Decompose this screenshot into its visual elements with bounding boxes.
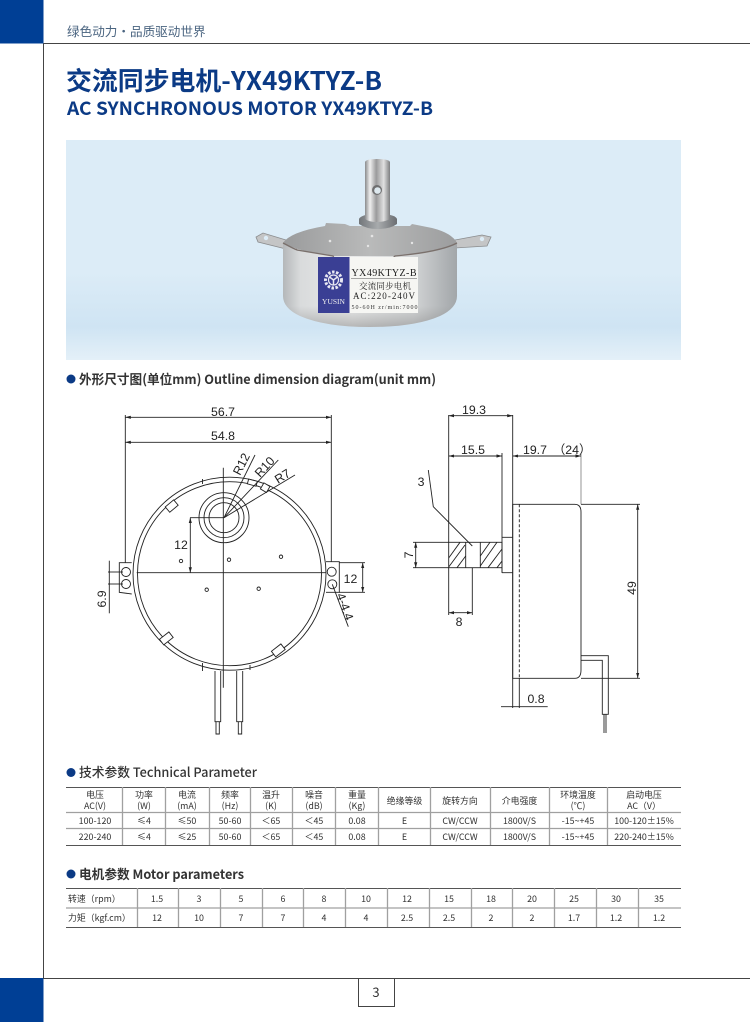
dimension 4-4.4 xyxy=(332,584,356,627)
table: motor parameters: 2 xyxy=(530,911,535,924)
dimension R12: R12 xyxy=(230,451,253,477)
table: motor parameters: 力矩（kgf.cm） xyxy=(68,911,131,924)
page number box xyxy=(358,978,394,1006)
table: motor parameters: 1.2 xyxy=(610,911,622,924)
table: technical parameter: (Hz) xyxy=(222,799,238,812)
table: technical parameter: (W) xyxy=(137,799,151,812)
table: technical parameter: ≤4 xyxy=(137,830,151,843)
dimension 7: 7 xyxy=(402,551,416,558)
table: technical parameter: 100-120±15% xyxy=(614,814,674,827)
table: technical parameter: ＜65 xyxy=(262,814,280,827)
footer corner block xyxy=(0,978,44,1022)
panel: product photo xyxy=(66,140,681,360)
table: motor parameters: 2 xyxy=(489,911,494,924)
table: motor parameters: 18 xyxy=(486,892,496,905)
dimension R10: R10 xyxy=(252,454,278,480)
table: technical parameter: 220-240±15% xyxy=(614,830,674,843)
table: technical parameter: 50-60 xyxy=(219,814,241,827)
table: motor parameters: 4 xyxy=(322,911,327,924)
dimension 19.3: 19.3 xyxy=(462,403,486,417)
table: motor parameters: 20 xyxy=(527,892,537,905)
table: motor parameters: 12 xyxy=(402,892,412,905)
table: motor parameters: 8 xyxy=(322,892,327,905)
table: technical parameter: 220-240 xyxy=(79,830,111,843)
motor label: AC:220-240V xyxy=(353,291,416,301)
table: technical parameter: AC(V) xyxy=(84,799,106,812)
table: motor parameters: 2.5 xyxy=(443,911,455,924)
dimension 49: 49 xyxy=(625,581,639,595)
table: technical parameter: 频率 xyxy=(221,788,239,801)
table: motor parameters: 5 xyxy=(239,892,244,905)
title: english: AC SYNCHRONOUS MOTOR YX49KTYZ-B xyxy=(66,95,433,121)
table: technical parameter: 介电强度 xyxy=(502,794,537,807)
table: technical parameter: E xyxy=(402,830,407,843)
dimension R12 xyxy=(224,451,255,518)
table: technical parameter xyxy=(66,787,681,846)
table: technical parameter: ≤50 xyxy=(178,814,196,827)
heading: outline dimension diagram: 外形尺寸图(单位mm) Outline dimension diagram(unit mm) xyxy=(79,369,436,388)
dimension 0.8 xyxy=(501,678,548,708)
motor label: YX49KTYZ-B xyxy=(352,268,417,279)
heading: technical parameter: 技术参数 Technical Parameter xyxy=(79,762,258,781)
table: motor parameters: 2.5 xyxy=(401,911,413,924)
table: motor parameters: 1.2 xyxy=(653,911,665,924)
motor label xyxy=(318,257,418,313)
table: motor parameters: 4 xyxy=(364,911,369,924)
table: motor parameters: 35 xyxy=(654,892,664,905)
dimension 19.7 (24): （24） xyxy=(553,443,591,457)
table: technical parameter: 1800V/S xyxy=(503,814,536,827)
table: motor parameters: 15 xyxy=(444,892,454,905)
table: technical parameter: 0.08 xyxy=(348,814,366,827)
table: technical parameter: 电压 xyxy=(86,788,104,801)
table: technical parameter: (mA) xyxy=(177,799,197,812)
motor label: 50-60H zr/min:7000 xyxy=(352,305,418,311)
table: technical parameter: ≤25 xyxy=(178,830,196,843)
table: motor parameters: 7 xyxy=(239,911,244,924)
chart: front view outline drawing xyxy=(95,405,365,734)
chart: side view outline drawing xyxy=(402,403,640,733)
table: technical parameter: (K) xyxy=(265,799,277,812)
icon: motor xyxy=(256,159,491,327)
table: technical parameter: ≤4 xyxy=(137,814,151,827)
table: technical parameter: CW/CCW xyxy=(442,830,478,843)
dimension 8 xyxy=(449,568,472,629)
dimension 15.5 xyxy=(449,443,502,457)
table: technical parameter: (dB) xyxy=(305,799,323,812)
title: chinese: 交流同步电机-YX49KTYZ-B xyxy=(66,61,382,98)
table: motor parameters: 12 xyxy=(152,911,162,924)
dimension 15.5: 15.5 xyxy=(461,443,485,457)
table: technical parameter: ＜65 xyxy=(262,830,280,843)
motor label: 交流同步电机 xyxy=(359,280,411,292)
table: technical parameter: 100-120 xyxy=(79,814,111,827)
label 3: 3 xyxy=(418,475,425,489)
table: motor parameters: 10 xyxy=(361,892,371,905)
table: technical parameter: 环境温度 xyxy=(560,788,596,801)
dimension R7 xyxy=(224,466,295,518)
dimension 12 vertical: 12 xyxy=(174,538,188,552)
table: technical parameter: 50-60 xyxy=(219,830,241,843)
motor label: YUSIN xyxy=(322,297,346,306)
dimension 12 tab: 12 xyxy=(344,572,357,586)
table: technical parameter: (℃) xyxy=(571,799,585,812)
header corner block xyxy=(0,0,44,44)
table: technical parameter: 启动电压 xyxy=(626,788,662,801)
dimension 19.7 (24): 19.7 xyxy=(523,443,547,457)
table: technical parameter: ＜45 xyxy=(305,830,323,843)
table: motor parameters: 6 xyxy=(281,892,286,905)
dimension 54.8: 54.8 xyxy=(211,429,235,443)
table: technical parameter: 旋转方向 xyxy=(442,794,478,807)
table: technical parameter: 功率 xyxy=(135,788,153,801)
dimension 19.3 xyxy=(449,403,513,417)
dimension 6.9: 6.9 xyxy=(95,590,109,608)
table: technical parameter: (Kg) xyxy=(349,799,365,812)
table: motor parameters: 10 xyxy=(194,911,204,924)
dimension 7 xyxy=(402,542,449,568)
table: technical parameter: 0.08 xyxy=(348,830,366,843)
dimension R7: R7 xyxy=(272,466,293,487)
dimension 12 tab xyxy=(339,563,365,592)
dimension 8: 8 xyxy=(456,615,463,629)
table: motor parameters: 3 xyxy=(197,892,202,905)
table: motor parameters: 7 xyxy=(281,911,286,924)
dimension R10 xyxy=(224,454,278,518)
page number box: 3 xyxy=(372,982,380,1001)
table: technical parameter: E xyxy=(402,814,407,827)
table: motor parameters: 25 xyxy=(569,892,579,905)
table: technical parameter: -15~+45 xyxy=(562,814,594,827)
table: motor parameters: 30 xyxy=(611,892,621,905)
dimension 4-4.4: 4-4.4 xyxy=(333,591,356,622)
table: technical parameter: 温升 xyxy=(262,788,280,801)
table: technical parameter: AC（V） xyxy=(627,799,661,812)
dimension 56.7: 56.7 xyxy=(211,405,235,419)
dimension 6.9 xyxy=(95,561,123,613)
table: motor parameters: 1.7 xyxy=(568,911,580,924)
table: technical parameter: ＜45 xyxy=(305,814,323,827)
table: technical parameter: 绝缘等级 xyxy=(387,794,422,807)
dimension 12 vertical xyxy=(174,518,224,573)
table: motor parameters xyxy=(66,888,681,928)
table: technical parameter: CW/CCW xyxy=(442,814,478,827)
table: technical parameter: 1800V/S xyxy=(503,830,536,843)
table: technical parameter: 电流 xyxy=(178,788,196,801)
table: technical parameter: -15~+45 xyxy=(562,830,594,843)
dimension 0.8: 0.8 xyxy=(527,692,545,706)
header slogan: 绿色动力・品质驱动世界 xyxy=(67,21,206,40)
dimension 19.7 (24) xyxy=(513,443,591,457)
table: technical parameter: 重量 xyxy=(348,788,366,801)
table: motor parameters: 1.5 xyxy=(151,892,163,905)
table: technical parameter: 噪音 xyxy=(305,788,323,801)
table: motor parameters: 转速（rpm） xyxy=(68,892,121,905)
heading: motor parameters: 电机参数 Motor parameters xyxy=(79,864,244,883)
